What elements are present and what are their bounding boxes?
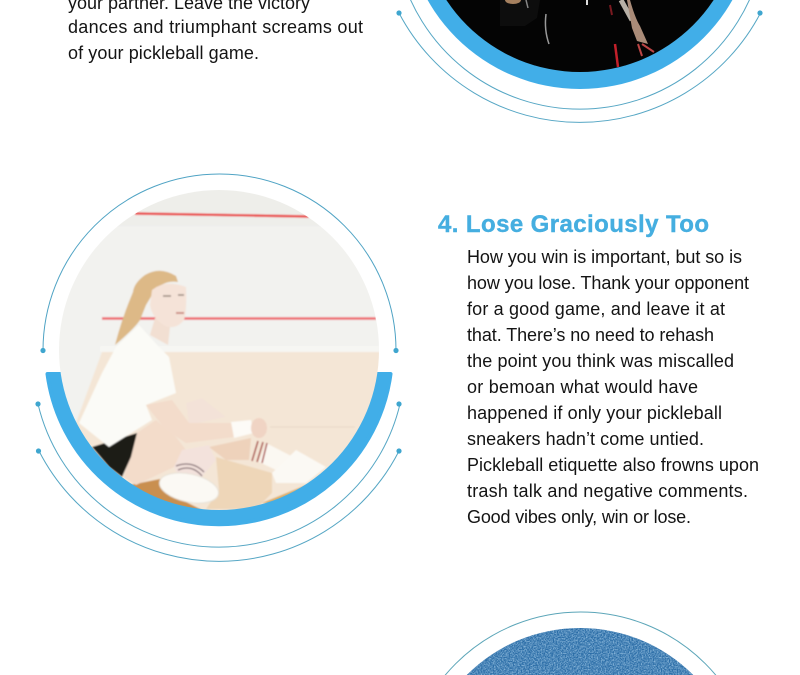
arm and wristband	[146, 400, 234, 443]
arc: lower outer ring with end dots	[36, 448, 402, 561]
arc: lower outer ring with end dots	[396, 10, 763, 122]
text block: tip 4 body: or bemoan what would have	[467, 377, 698, 397]
text block: tip 4 body: how you lose. Thank your opponent	[467, 273, 749, 293]
text block: tip 4 body: that. There’s no need to rehash	[467, 325, 714, 345]
arc: top ring with end dots	[40, 174, 399, 353]
text block: tip 4 body: trash talk and negative comments.	[467, 481, 748, 501]
photo: blue court surface	[466, 628, 694, 675]
blue crescent	[48, 374, 390, 524]
photo: woman sitting on court	[55, 186, 385, 516]
text block: tip 4 body: Pickleball etiquette also frowns upon	[467, 455, 759, 475]
photo: player in dark kit	[446, 0, 714, 72]
text block: tip 4 body: sneakers hadn’t come untied.	[467, 429, 704, 449]
text block: tip 4 body: for a good game, and leave it at	[467, 299, 725, 319]
legs	[124, 420, 186, 485]
arc: top ring	[404, 612, 757, 675]
shirt	[79, 325, 176, 447]
text block: tip 4 body	[467, 247, 759, 527]
panel: tip 4 circular photo frame	[35, 174, 402, 561]
text block: tip 4 body: How you win is important, but so is	[467, 247, 742, 267]
panel: tip 3 circular photo frame	[396, 0, 763, 122]
text block: end of tip 3	[68, 0, 363, 63]
blue crescent	[405, 0, 755, 89]
text block: tip 4 body: happened if only your pickleball	[467, 403, 722, 423]
text block: tip 4 body: Good vibes only, win or lose.	[467, 507, 691, 527]
panel: tip 5 circular photo frame	[444, 612, 716, 675]
ponytail and head	[115, 271, 178, 345]
heading: tip 4: 4. Lose Graciously Too	[438, 211, 709, 238]
text block: end of tip 3: dances and triumphant screams out	[68, 17, 363, 37]
floor	[132, 478, 202, 509]
arc: lower inner ring with end dots	[35, 401, 402, 547]
text block: end of tip 3: of your pickleball game.	[68, 43, 259, 63]
arc: lower inner ring	[399, 0, 761, 109]
text block: tip 4 body: the point you think was miscalled	[467, 351, 734, 371]
